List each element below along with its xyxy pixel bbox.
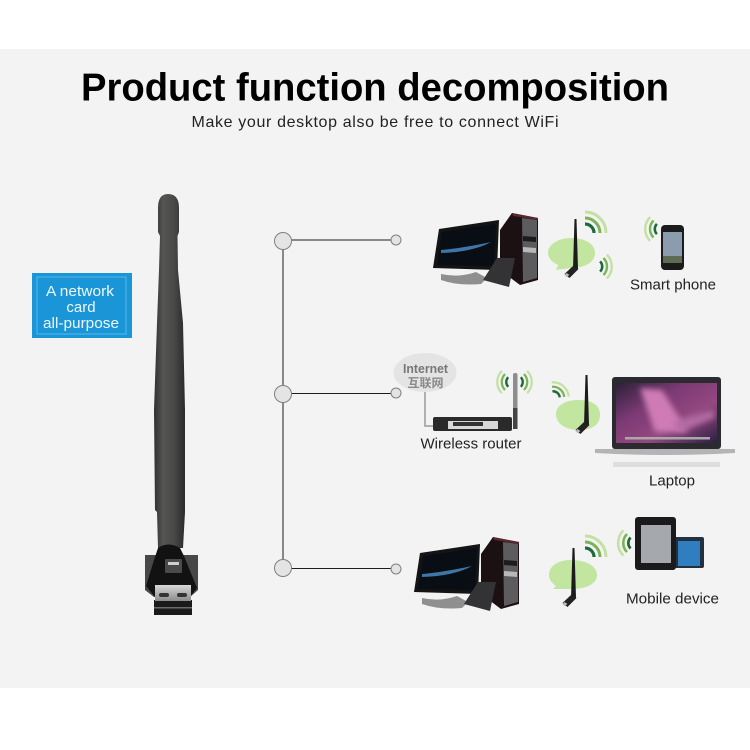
- icon: usb dongle: [576, 375, 590, 434]
- icon: wifi waves upper: [579, 532, 610, 563]
- row 3: desktop to mobile device: [414, 517, 719, 611]
- icon: tablets: [635, 517, 704, 570]
- antenna: [154, 194, 185, 548]
- icon: wifi waves upper: [579, 208, 610, 239]
- icon: usb dongle: [564, 219, 578, 278]
- label: wireless router: Wireless router: [420, 436, 522, 452]
- icon: internet cloud: 互联网: [407, 376, 444, 390]
- label: smart phone: Smart phone: [630, 276, 716, 294]
- icon: green speech bubble: [548, 238, 595, 270]
- icon: green speech bubble: [549, 560, 597, 589]
- icon: desktop computer: [414, 537, 519, 611]
- row 2: router to laptop: [394, 353, 735, 490]
- callout: a network card all-purpose: A network: [46, 283, 115, 300]
- icon: smart phone: [661, 225, 684, 270]
- callout: a network card all-purpose: [32, 273, 132, 338]
- icon: wifi waves dongle: [548, 379, 572, 402]
- USB plug: [154, 585, 192, 615]
- callout: a network card all-purpose: card: [66, 299, 96, 316]
- icon: internet cloud: Internet: [403, 361, 449, 376]
- icon: wifi waves device: [618, 530, 631, 556]
- antenna hub: [146, 544, 197, 597]
- subtitle: Make your desktop also be free to connect WiFi: [192, 114, 558, 131]
- icon: green speech bubble: [556, 400, 600, 430]
- icon: wifi waves router left: [497, 371, 508, 393]
- icon: laptop: [595, 377, 735, 467]
- callout: a network card all-purpose: all-purpose: [43, 315, 119, 332]
- antenna wings: [145, 555, 198, 597]
- icon: usb dongle: [562, 548, 576, 607]
- USB wifi adapter with antenna: [145, 194, 198, 615]
- icon: wifi waves lower: [600, 255, 612, 278]
- icon: wifi waves phone: [645, 217, 657, 241]
- icon: internet cloud: [394, 353, 456, 392]
- label: laptop: Laptop: [649, 472, 695, 490]
- title: Product function decomposition: [81, 66, 669, 110]
- row 1: desktop to smart phone: [433, 208, 716, 294]
- icon: desktop computer: [433, 213, 538, 287]
- icon: wifi waves router right: [521, 371, 532, 393]
- label: mobile device: Mobile device: [626, 590, 719, 608]
- connector lines: [274, 232, 401, 576]
- icon: wireless router: [425, 373, 518, 431]
